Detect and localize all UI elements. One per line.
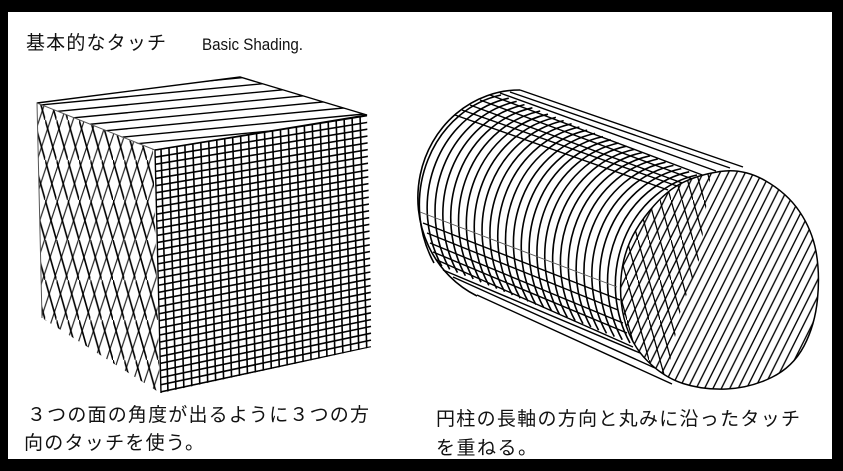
cylinder bottom band: long-axis lines — [420, 212, 672, 384]
caption: cube — [24, 404, 369, 454]
cube outline — [37, 77, 367, 393]
caption: cylinder: を重ねる。 — [436, 437, 537, 459]
cube illustration — [30, 65, 376, 400]
cube left face: diagonal cross hatching — [38, 104, 160, 391]
caption: cube: ３つの面の角度が出るように３つの方 — [27, 404, 369, 426]
title — [26, 32, 303, 54]
cylinder illustration — [418, 90, 830, 400]
title: Basic Shading. — [202, 35, 303, 54]
cylinder end face: diagonal hatching — [620, 170, 820, 390]
cylinder top band: long-axis lines — [455, 90, 743, 190]
caption: cube: 向のタッチを使う。 — [24, 432, 204, 454]
caption: cylinder: 円柱の長軸の方向と丸みに沿ったタッチ — [436, 408, 800, 430]
cube top face: single hatching — [41, 78, 364, 150]
cube right face: grid hatching — [156, 116, 372, 392]
cylinder back outline — [418, 90, 520, 296]
caption: cylinder — [436, 408, 800, 459]
cylinder body: curved arc hatching — [419, 95, 697, 343]
title: 基本的なタッチ — [26, 32, 166, 54]
